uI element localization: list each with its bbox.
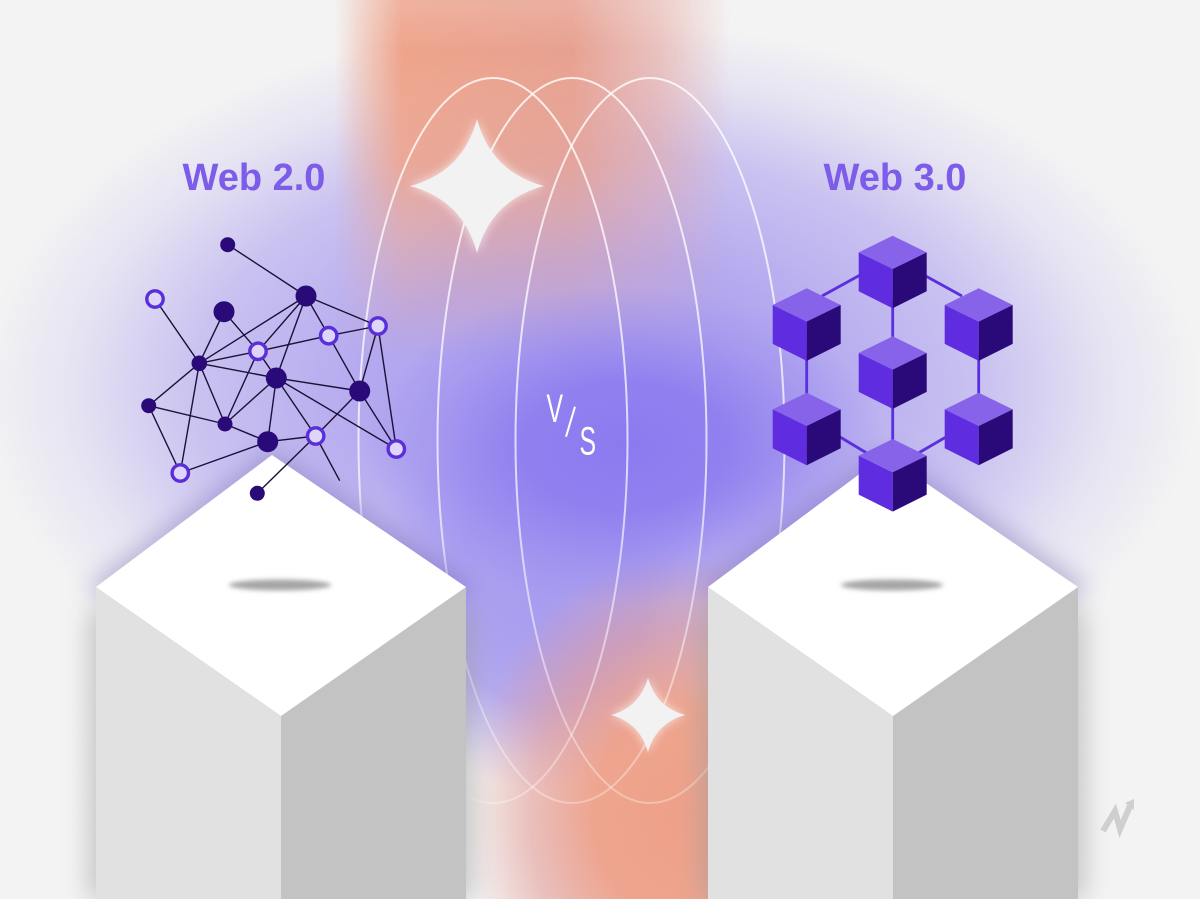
ring nodes xyxy=(147,291,405,481)
logo watermark xyxy=(1103,799,1134,831)
cube: lower left xyxy=(773,393,841,465)
icon: large sparkle star xyxy=(410,119,544,253)
pillar: Web 3.0 xyxy=(708,455,1078,899)
solid nodes xyxy=(141,237,370,501)
cube: top xyxy=(859,236,927,308)
versus label: S xyxy=(580,420,596,464)
cube: middle xyxy=(859,336,927,409)
heading: Web 3.0: Web 3.0 xyxy=(824,157,966,199)
chain links xyxy=(807,274,979,455)
cube: bottom xyxy=(859,439,927,512)
versus label: V xyxy=(546,387,564,432)
cube: lower right xyxy=(945,393,1013,465)
network links xyxy=(149,245,396,493)
pillar shadows xyxy=(86,450,1090,899)
icon: small sparkle star xyxy=(611,678,685,752)
versus label xyxy=(546,387,596,464)
cube: upper left xyxy=(773,288,841,361)
network diagram: Web 2.0 xyxy=(141,237,404,501)
blockchain diagram: Web 3.0 xyxy=(773,236,1013,512)
heading: Web 2.0: Web 2.0 xyxy=(183,157,325,199)
floating shadow: network xyxy=(229,580,331,590)
cube: upper right xyxy=(945,288,1013,361)
floating shadow: blockchain xyxy=(841,580,943,590)
pillar: Web 2.0 xyxy=(96,455,466,899)
oval outlines xyxy=(358,78,784,803)
